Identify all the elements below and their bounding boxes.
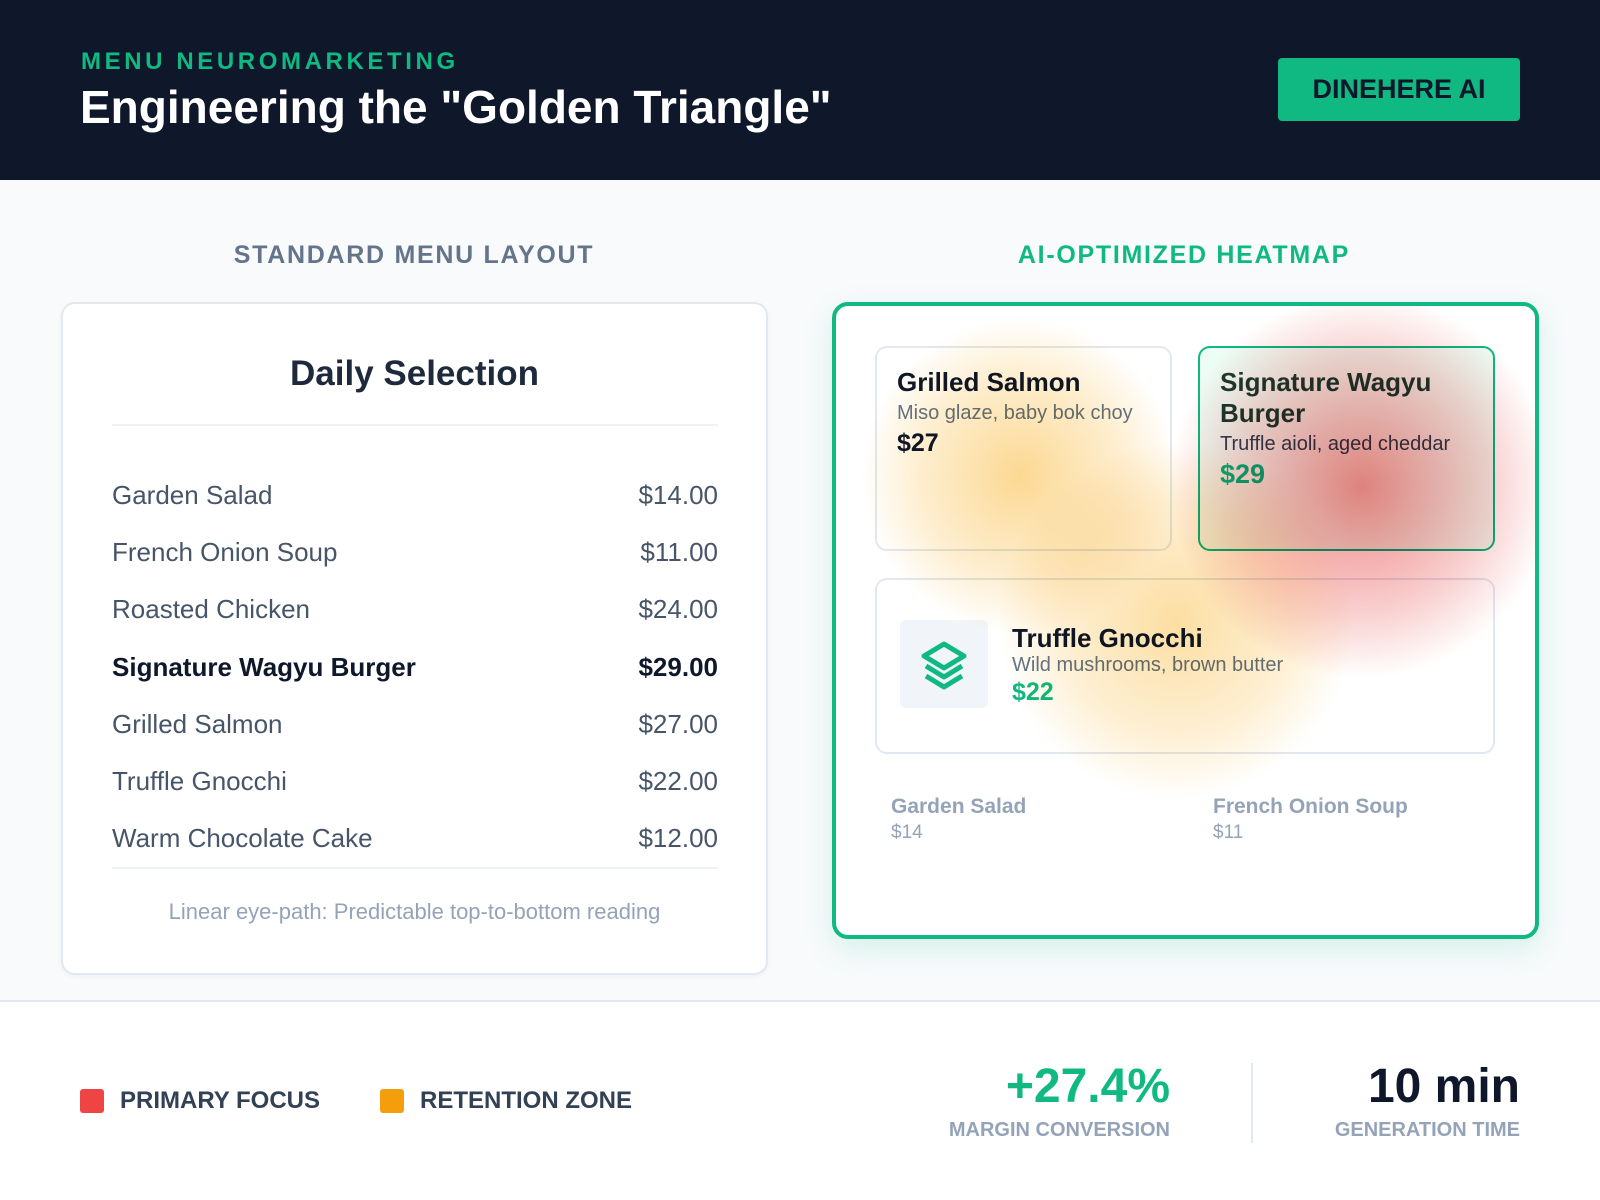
panel: heatmap (832, 302, 1539, 939)
menu rows: Signature Wagyu Burger (112, 652, 416, 682)
panel: heatmap: $11 (1213, 822, 1243, 843)
panel: standard menu (61, 302, 768, 975)
legend: PRIMARY FOCUS (120, 1087, 320, 1114)
panel: heatmap: French Onion Soup (1213, 795, 1408, 818)
card: gnocchi (875, 578, 1495, 754)
menu rows: Garden Salad (112, 480, 272, 510)
minor items: Garden Salad (891, 795, 1026, 818)
menu rows: $14.00 (638, 480, 718, 510)
card: gnocchi: Wild mushrooms, brown butter (1012, 654, 1283, 676)
menu rows: $27.00 (638, 709, 718, 739)
menu rows: Grilled Salmon (112, 709, 283, 739)
legend: RETENTION ZONE (420, 1087, 632, 1114)
stat: time: 10 min (1368, 1060, 1520, 1113)
card: wagyu (1198, 346, 1495, 551)
menu rows: French Onion Soup (112, 537, 337, 567)
card: salmon: $27 (897, 429, 939, 457)
minor items: $14 (891, 822, 923, 843)
footer (0, 1000, 1600, 1200)
menu rows (112, 480, 718, 853)
menu rows: Roasted Chicken (112, 594, 310, 624)
card: wagyu: Signature Wagyu (1220, 367, 1431, 397)
heading: standard: STANDARD MENU LAYOUT (234, 241, 594, 269)
blob: retention salmon (860, 316, 1180, 636)
menu rows: $29.00 (638, 652, 718, 682)
stat: margin: +27.4% (1006, 1060, 1170, 1113)
card: gnocchi: $22 (1012, 678, 1054, 706)
menu rows: Warm Chocolate Cake (112, 823, 373, 853)
blob: retention gnocchi (996, 441, 1356, 801)
blob: primary wagyu (1162, 286, 1562, 686)
card: salmon: Miso glaze, baby bok choy (897, 402, 1133, 424)
header (0, 0, 1600, 180)
stat: time (1335, 1060, 1520, 1141)
card: salmon (875, 346, 1172, 551)
menu rows: $22.00 (638, 766, 718, 796)
badge: DINEHERE AI (1312, 74, 1486, 104)
title: Engineering the "Golden Triangle" (80, 81, 832, 133)
menu rows: Truffle Gnocchi (112, 766, 287, 796)
stat: margin (949, 1060, 1170, 1141)
badge (1278, 58, 1520, 121)
legend (80, 1087, 632, 1114)
caption: Linear eye-path: Predictable top-to-bottom reading (169, 899, 660, 924)
menu rows: $12.00 (638, 823, 718, 853)
card: gnocchi: Truffle Gnocchi (1012, 623, 1203, 653)
subtitle: MENU NEUROMARKETING (81, 48, 459, 75)
card: wagyu: Truffle aioli, aged cheddar (1220, 433, 1450, 455)
menu rows: $24.00 (638, 594, 718, 624)
stat: margin: MARGIN CONVERSION (949, 1119, 1170, 1141)
stat: time: GENERATION TIME (1335, 1119, 1520, 1141)
card: wagyu: $29 (1220, 459, 1265, 489)
card: wagyu: Burger (1220, 398, 1305, 428)
heading: ai: AI-OPTIMIZED HEATMAP (1018, 241, 1350, 269)
menu rows: $11.00 (640, 537, 718, 567)
icon: layers (900, 620, 988, 708)
card: salmon: Grilled Salmon (897, 367, 1080, 397)
minor items (891, 795, 1026, 843)
menu title: Daily Selection (290, 354, 539, 393)
